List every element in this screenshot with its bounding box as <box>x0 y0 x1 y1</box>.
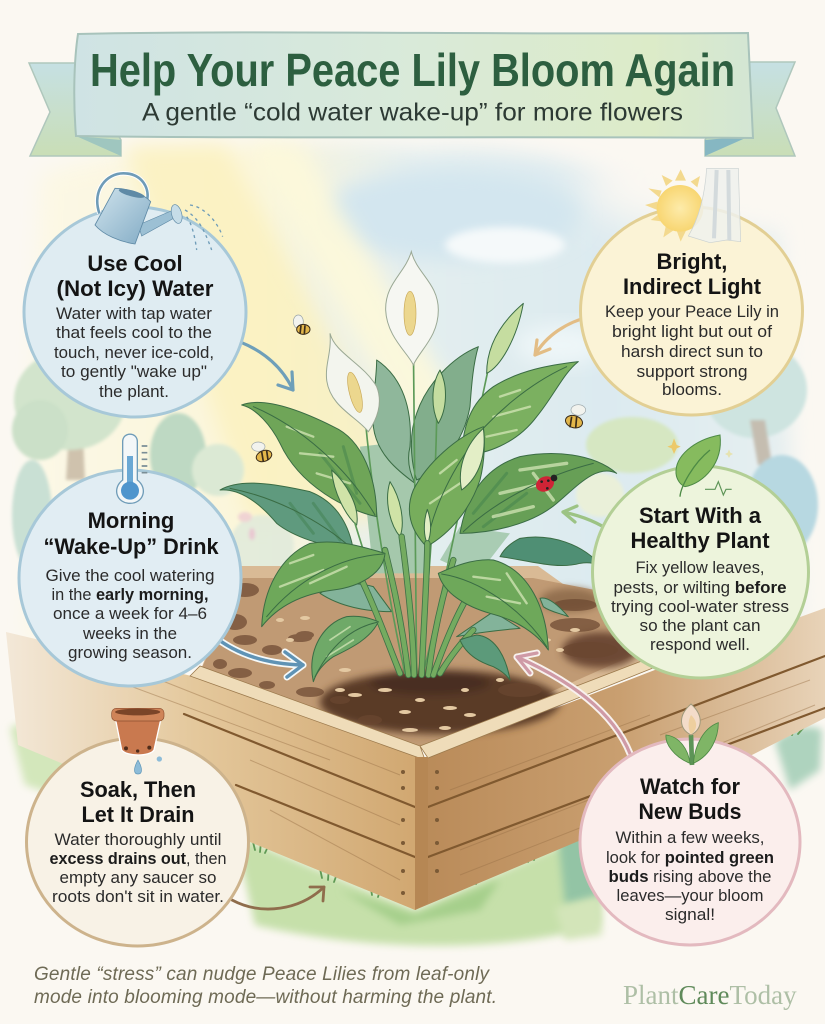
body text <box>606 828 774 924</box>
heading <box>630 503 770 553</box>
heading: Use Cool <box>87 251 183 276</box>
body text: support strong <box>636 362 748 381</box>
body text: Within a few weeks, <box>616 828 764 847</box>
grain <box>60 660 815 880</box>
heading <box>44 508 219 559</box>
rim strips <box>190 666 425 760</box>
bee right <box>564 405 586 430</box>
heading: Healthy Plant <box>630 528 770 553</box>
raised bed <box>6 566 825 910</box>
bee top <box>293 315 310 334</box>
body text: empty any saucer so <box>60 868 216 887</box>
leaf upper right <box>462 362 578 454</box>
body text <box>54 304 214 401</box>
stem bundle <box>360 537 473 675</box>
title: Help Your Peace Lily Bloom Again <box>90 44 735 96</box>
body text: Keep your Peace Lily in <box>605 302 779 321</box>
trees right <box>576 342 818 555</box>
footer note: Gentle “stress” can nudge Peace Lilies from leaf-only <box>34 964 490 985</box>
body text: excess drains out, then <box>50 849 226 868</box>
leaf lower left large <box>262 542 385 627</box>
heading: Soak, Then <box>80 777 196 802</box>
panel: bright indirect light <box>580 168 802 415</box>
body text: signal! <box>665 905 715 924</box>
leaf center front <box>409 427 484 547</box>
footer note: mode into blooming mode—without harming the plant. <box>34 987 497 1008</box>
lower buds <box>332 470 370 573</box>
soil clumps <box>213 583 618 725</box>
grass tufts <box>250 715 812 897</box>
body text <box>50 830 226 906</box>
grass <box>10 723 822 946</box>
upper buds <box>433 303 523 423</box>
body text: pests, or wilting before <box>614 578 786 597</box>
icon: leaf with pulse <box>667 435 733 497</box>
right wood face <box>415 608 825 910</box>
logo: PlantCareToday <box>623 980 797 1010</box>
inner back wall <box>200 566 662 750</box>
heading: Indirect Light <box>623 274 762 299</box>
left ribbon tail <box>29 63 121 156</box>
banner body <box>74 32 753 138</box>
plank lines <box>184 656 825 857</box>
heading: Watch for <box>640 774 740 799</box>
soil <box>200 578 645 750</box>
body text: Water with tap water <box>56 304 212 323</box>
icon: sun and curtain <box>645 168 741 243</box>
icon: terracotta pot <box>112 708 164 774</box>
body text: to gently "wake up" <box>61 362 207 381</box>
body text: blooms. <box>662 380 722 399</box>
ribbon folds <box>76 136 750 156</box>
body text <box>611 558 789 654</box>
body text: weeks in the <box>82 624 177 643</box>
panel: morning drink <box>19 434 241 686</box>
sun rays <box>125 145 470 520</box>
body text <box>46 566 214 662</box>
corner post <box>415 757 428 910</box>
panel: watch for new buds <box>580 704 800 945</box>
peace lily plant <box>220 252 617 682</box>
leaf left teal <box>220 483 353 550</box>
body text: the plant. <box>99 382 169 401</box>
heading: Let It Drain <box>82 802 194 827</box>
icon: flower bud <box>666 704 718 765</box>
screws <box>401 770 439 895</box>
heading: Start With a <box>639 503 762 528</box>
panel: use cool water <box>24 173 246 417</box>
body text: once a week for 4–6 <box>53 604 207 623</box>
right ribbon tail <box>705 62 795 156</box>
leaf small lower left <box>312 616 378 682</box>
arrow: light to plant <box>535 316 592 355</box>
dark soil patch <box>320 588 638 734</box>
subtitle: A gentle “cold water wake-up” for more flowers <box>142 98 683 126</box>
panel: healthy plant <box>592 435 808 678</box>
arrow: morning drink to plant <box>210 633 303 677</box>
body text <box>605 302 779 399</box>
trees left <box>12 350 294 575</box>
flower stems <box>365 340 483 673</box>
leaf lower right large <box>438 560 548 650</box>
leaf small lower right <box>460 635 510 680</box>
sky wash <box>25 140 820 640</box>
panel: soak and drain <box>26 708 248 946</box>
leaf right <box>460 454 617 533</box>
white flower left <box>326 333 379 432</box>
heading: Morning <box>88 508 174 533</box>
icon: watering can <box>95 173 223 250</box>
body text: buds rising above the <box>608 867 772 886</box>
body text: roots don't sit in water. <box>52 887 224 906</box>
ladybug <box>533 473 557 495</box>
body text: Water thoroughly until <box>54 830 222 849</box>
leaf upper left <box>242 402 377 517</box>
body text: leaves—your bloom <box>616 886 764 905</box>
center buds <box>388 482 431 544</box>
body text: respond well. <box>650 635 750 654</box>
banner <box>29 32 795 156</box>
body text: that feels cool to the <box>56 323 212 342</box>
body text: trying cool-water stress <box>611 597 789 616</box>
arrow: cool water to plant <box>225 337 293 390</box>
body text: Fix yellow leaves, <box>636 558 764 577</box>
body text: touch, never ice-cold, <box>54 343 214 362</box>
body text: in the early morning, <box>52 585 208 604</box>
body text: harsh direct sun to <box>621 342 763 361</box>
white bud center <box>460 428 484 490</box>
footer note <box>34 964 497 1008</box>
body text: look for pointed green <box>606 848 774 867</box>
heading <box>80 777 196 827</box>
heading: New Buds <box>638 799 742 824</box>
back leaves <box>320 347 568 637</box>
body text: Give the cool watering <box>46 566 214 585</box>
icon: thermometer <box>117 434 147 503</box>
leaves <box>220 362 617 682</box>
arrow: healthy plant to plant <box>563 506 613 533</box>
arrow: drain to plant <box>232 887 324 909</box>
body text: growing season. <box>68 643 192 662</box>
heading: “Wake-Up” Drink <box>44 534 219 559</box>
arrow: new buds to plant <box>517 653 633 762</box>
heading: Bright, <box>657 249 727 274</box>
heading <box>638 774 742 824</box>
body text: so the plant can <box>640 616 760 635</box>
white flower top <box>386 252 438 365</box>
leaf right dark <box>500 537 603 568</box>
heading <box>56 251 214 301</box>
body text: bright light but out of <box>612 322 772 341</box>
heading <box>623 249 762 299</box>
left wood face <box>6 632 426 910</box>
heading: (Not Icy) Water <box>56 276 214 301</box>
bee left <box>252 442 273 464</box>
